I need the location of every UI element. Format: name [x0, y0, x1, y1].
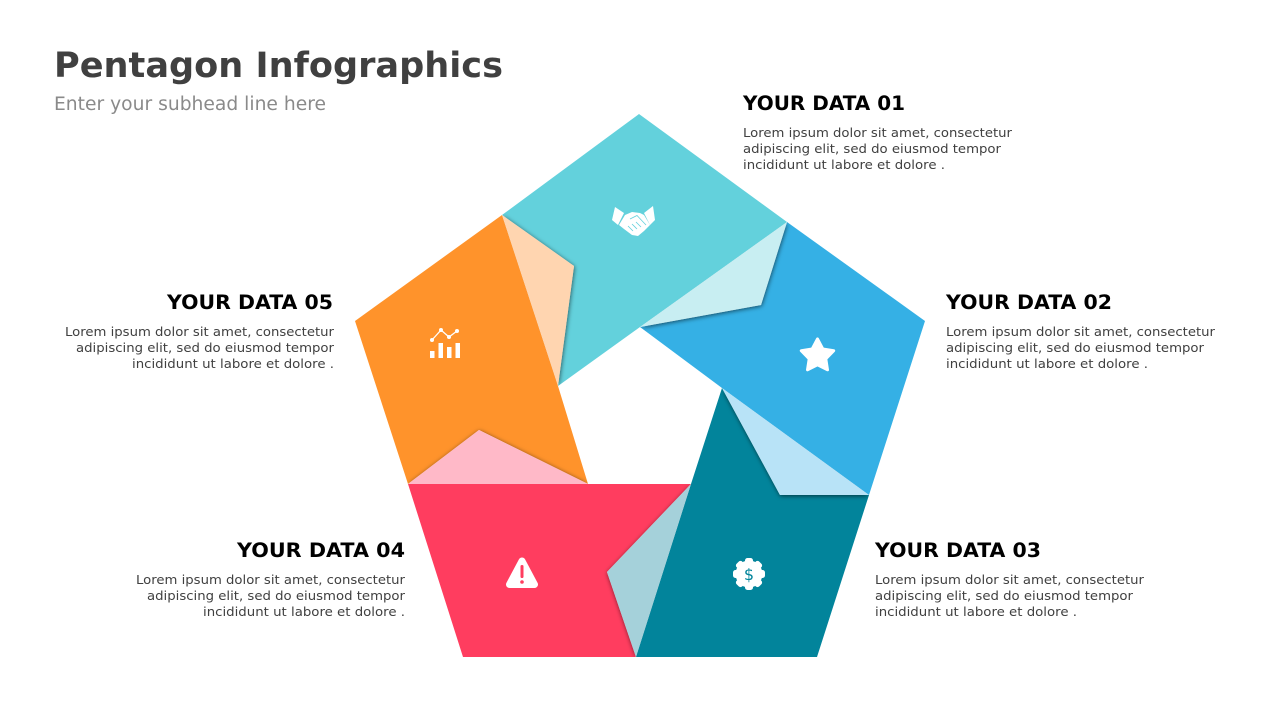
text block: data 05: Lorem ipsum dolor sit amet, consectetur: [65, 324, 335, 339]
segment 01: cyan: [502, 114, 787, 386]
icon: gear with dollar: $: [744, 565, 754, 584]
text block: data 02: incididunt ut labore et dolore .: [946, 356, 1148, 371]
text block: data 05: YOUR DATA 05: [166, 291, 333, 314]
text block: data 04: incididunt ut labore et dolore .: [203, 604, 405, 619]
text block: data 03: Lorem ipsum dolor sit amet, consectetur: [875, 572, 1145, 587]
title: Pentagon Infographics: [54, 46, 503, 86]
segment 04: red: [408, 484, 691, 657]
icon: warning triangle: [510, 561, 534, 584]
segment 02: blue: [640, 222, 925, 495]
text block: data 02: Lorem ipsum dolor sit amet, consectetur: [946, 324, 1216, 339]
pentagon diagram: [355, 114, 925, 657]
text block: data 05: incididunt ut labore et dolore .: [132, 356, 334, 371]
fold: light blue on teal: [722, 388, 869, 495]
fold: light cyan on blue: [640, 222, 787, 327]
text block: data 02: YOUR DATA 02: [945, 291, 1112, 314]
text block: data 04: [136, 539, 406, 619]
text block: data 02: [945, 291, 1216, 371]
icon: gear with dollar: [733, 558, 765, 590]
subtitle: Enter your subhead line here: [54, 94, 326, 115]
text block: data 02: adipiscing elit, sed do eiusmod tempor: [946, 340, 1205, 355]
text block: data 03: YOUR DATA 03: [874, 539, 1041, 562]
fold: light teal on red: [607, 484, 691, 657]
text block: data 04: adipiscing elit, sed do eiusmod tempor: [147, 588, 406, 603]
text block: data 01: [742, 92, 1013, 172]
text block: data 01: YOUR DATA 01: [742, 92, 905, 115]
text block: data 05: adipiscing elit, sed do eiusmod tempor: [76, 340, 335, 355]
segment 05: orange: [355, 215, 588, 484]
text block: data 03: incididunt ut labore et dolore .: [875, 604, 1077, 619]
text block: data 01: incididunt ut labore et dolore .: [743, 157, 945, 172]
text block: data 03: adipiscing elit, sed do eiusmod tempor: [875, 588, 1134, 603]
segment 03: teal: [636, 388, 869, 657]
text block: data 04: Lorem ipsum dolor sit amet, consectetur: [136, 572, 406, 587]
text block: data 01: adipiscing elit, sed do eiusmod tempor: [743, 141, 1002, 156]
text block: data 04: YOUR DATA 04: [236, 539, 405, 562]
icon: chart: [430, 328, 460, 358]
fold: light orange on cyan: [502, 215, 574, 386]
text block: data 05: [65, 291, 335, 371]
icon: star: [801, 339, 834, 370]
fold: pink on orange: [408, 430, 588, 484]
text block: data 03: [874, 539, 1145, 619]
text block: data 01: Lorem ipsum dolor sit amet, consectetur: [743, 125, 1013, 140]
icon: handshake: [612, 206, 655, 236]
